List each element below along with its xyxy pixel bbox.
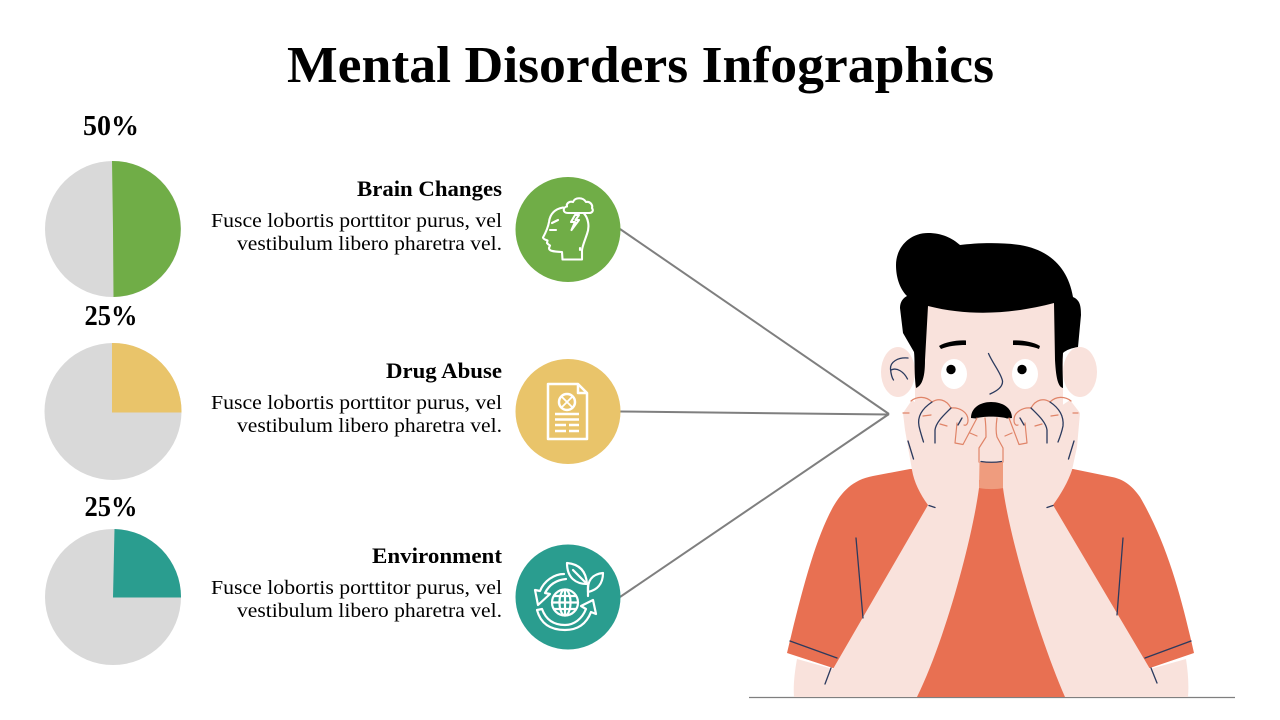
panel: environment pie chart: [45, 529, 181, 665]
text block: environment: Environment: [372, 543, 503, 568]
hair: [896, 233, 1081, 388]
fingers: coral outlines: [903, 397, 1078, 462]
percentage label: 25% second: 25%: [84, 491, 138, 523]
text block: environment: vestibulum libero pharetra vel.: [237, 600, 502, 622]
percentage label: 50%: 50%: [83, 110, 139, 142]
text block: drug abuse: Drug Abuse: [386, 358, 502, 383]
text block: drug abuse: vestibulum libero pharetra vel.: [237, 415, 502, 437]
panel: brain changes pie chart: [45, 161, 181, 297]
mustache: [971, 402, 1012, 418]
illustration: worried man: [749, 233, 1235, 698]
shirt: [787, 469, 1194, 697]
title: Mental Disorders Infographics: [287, 37, 994, 94]
text block: brain changes: [211, 176, 502, 255]
text block: brain changes: Brain Changes: [357, 176, 502, 201]
face: [915, 300, 1063, 480]
text block: environment: Fusce lobortis porttitor purus, vel: [211, 577, 502, 599]
floor line: [749, 696, 1235, 698]
text block: environment: [211, 543, 503, 622]
icon: drug abuse document: [516, 359, 620, 464]
neck: [979, 462, 1004, 489]
icon: brain changes head with storm cloud: [516, 177, 620, 282]
text block: drug abuse: [211, 358, 502, 437]
percentage label: 25% first: 25%: [84, 300, 138, 332]
eyebrows: [939, 340, 1040, 349]
eyes: [941, 359, 1038, 389]
text block: drug abuse: Fusce lobortis porttitor purus, vel: [211, 392, 502, 414]
text block: brain changes: vestibulum libero pharetra vel.: [237, 233, 502, 255]
ears: [881, 347, 1097, 397]
nose and ear lines: [890, 354, 1003, 394]
panel: drug abuse pie chart: [44, 343, 182, 480]
text block: brain changes: Fusce lobortis porttitor purus, vel: [211, 210, 502, 232]
connector arrows: [620, 229, 889, 597]
fingers: navy creases: [790, 402, 1191, 684]
arms: [794, 400, 979, 697]
icon: environment globe, leaves and arrows: [516, 544, 620, 650]
